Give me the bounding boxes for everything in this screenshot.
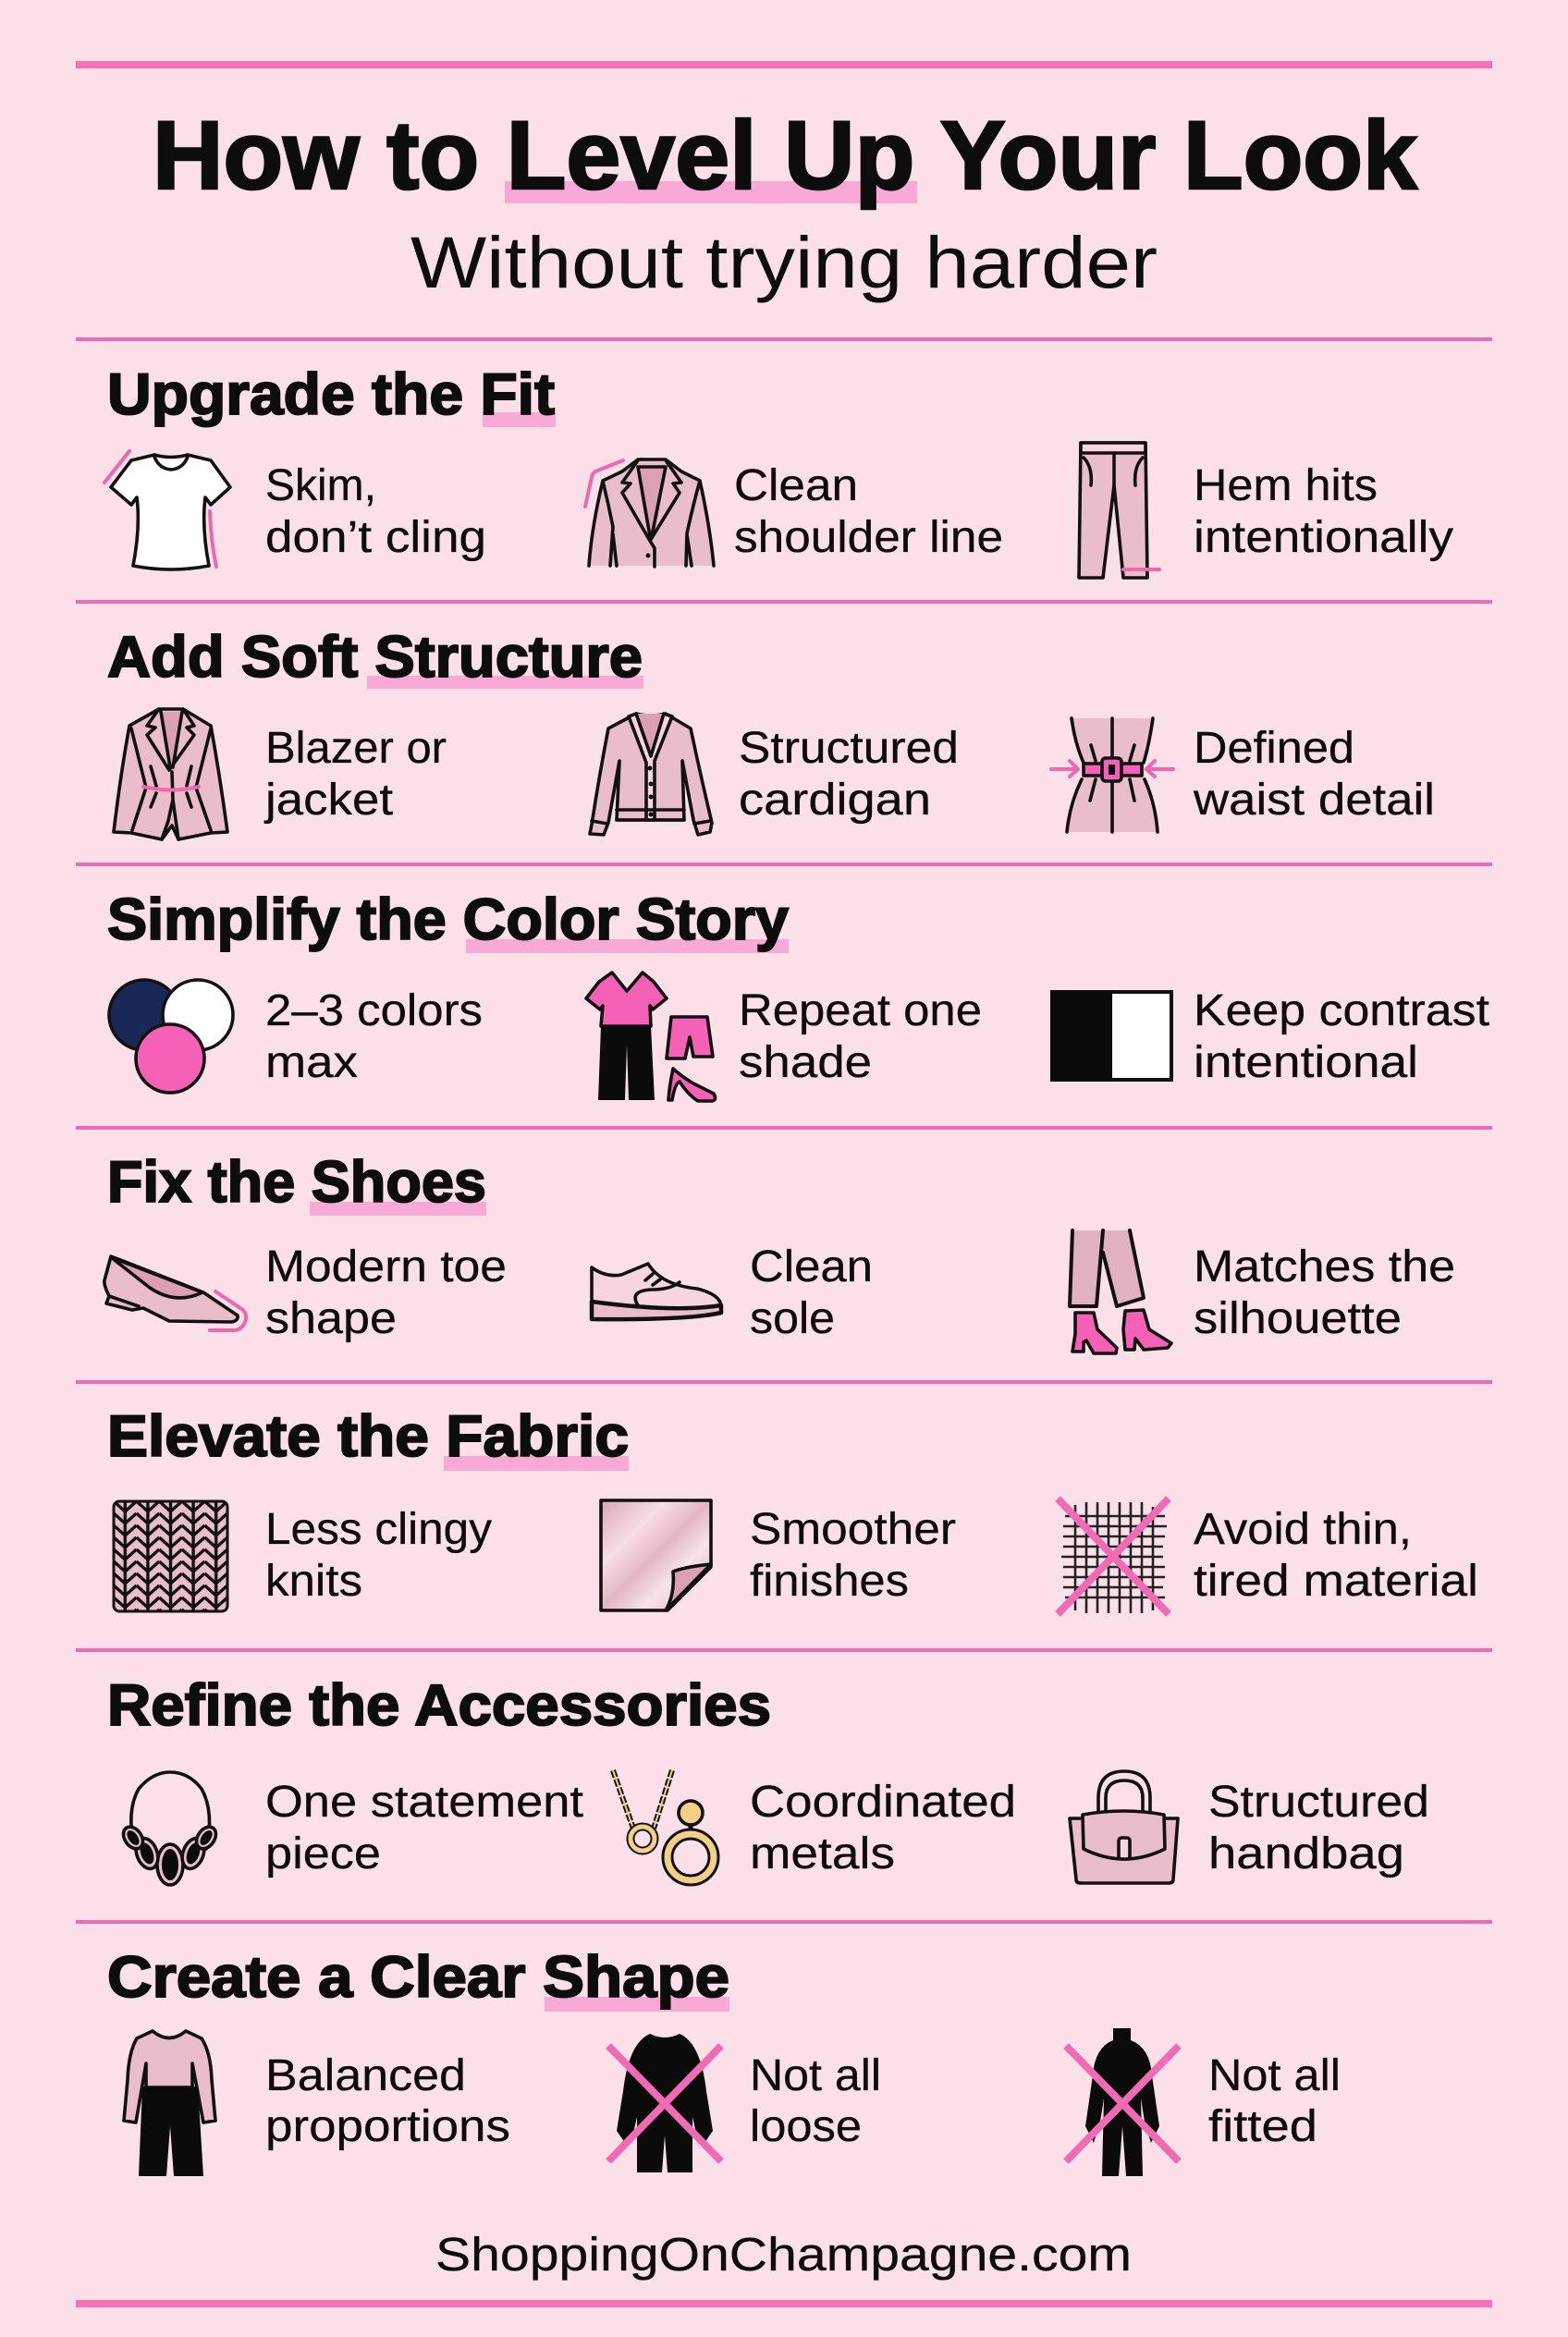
label: Defined — [1194, 724, 1354, 773]
label: intentionally — [1194, 513, 1453, 562]
subtitle: Without trying harder — [410, 221, 1158, 303]
label: tired material — [1194, 1557, 1478, 1606]
item: Repeat one shade — [586, 973, 982, 1101]
label: cardigan — [739, 776, 931, 825]
icon: balanced outfit — [124, 2031, 215, 2176]
label: Modern toe — [265, 1242, 507, 1291]
heading: Fix the Shoes: Fix the Shoes — [107, 1150, 486, 1215]
icon: loose silhouette crossed out — [608, 2034, 721, 2172]
label: Not all — [1208, 2051, 1341, 2100]
label: Less clingy — [265, 1505, 492, 1554]
item: Less clingy knits — [114, 1501, 492, 1611]
label: jacket — [263, 776, 393, 825]
label — [1194, 1242, 1455, 1343]
panel: Add Soft Structure — [107, 625, 1435, 839]
heading: Create a Clear Shape: Create a Clear Shape — [107, 1945, 729, 2010]
item: 2–3 colors max — [109, 980, 483, 1093]
label — [1208, 1778, 1429, 1878]
label: don’t cling — [265, 513, 486, 562]
label: shape — [265, 1294, 397, 1343]
item: Structured handbag — [1070, 1771, 1429, 1883]
label: intentional — [1194, 1038, 1418, 1087]
icon: three colour circles — [109, 980, 233, 1093]
item: Coordinated metals — [613, 1770, 1016, 1880]
icon: fitted silhouette crossed out — [1066, 2028, 1179, 2176]
label: piece — [265, 1829, 381, 1878]
icon: worn mesh with cross — [1058, 1499, 1169, 1614]
icon: knit swatch — [114, 1501, 227, 1611]
label — [1208, 2051, 1341, 2151]
icon: black and white square — [1050, 990, 1171, 1082]
label: finishes — [750, 1557, 909, 1606]
label — [739, 724, 959, 825]
label: Hem hits — [1194, 461, 1378, 510]
label: sole — [750, 1294, 835, 1343]
icon: cardigan — [590, 714, 712, 835]
label — [265, 2051, 510, 2151]
heading: Elevate the Fabric: Elevate the Fabric — [107, 1404, 629, 1469]
label: Balanced — [265, 2051, 466, 2100]
label: Matches the — [1194, 1242, 1455, 1291]
label: handbag — [1208, 1829, 1404, 1878]
panel: Refine the Accessories — [107, 1673, 1429, 1885]
panel: Elevate the Fabric — [107, 1404, 1478, 1614]
panel: Create a Clear Shape — [107, 1945, 1341, 2176]
icon: handbag — [1070, 1771, 1178, 1883]
label: knits — [265, 1557, 362, 1606]
icon: t-shirt — [104, 451, 230, 569]
icon: trousers with pink boots — [1070, 1230, 1171, 1353]
panel: Upgrade the Fit — [104, 362, 1453, 578]
heading: Add Soft Structure: Add Soft Structure — [107, 625, 643, 690]
icon: outfit with pink pieces — [586, 973, 716, 1101]
label — [750, 1778, 1016, 1878]
heading: Upgrade the Fit: Upgrade the Fit — [107, 362, 555, 427]
label: Not all — [750, 2051, 881, 2100]
icon: oxford shoe — [592, 1264, 721, 1319]
label: Blazer or — [265, 724, 447, 773]
label: Avoid thin, — [1194, 1505, 1412, 1554]
item: Blazer or jacket — [114, 709, 447, 839]
label: Keep contrast — [1194, 986, 1489, 1035]
item: Keep contrast intentional — [1050, 986, 1489, 1087]
icon: belted waist — [1051, 718, 1173, 832]
label: shoulder line — [734, 513, 1003, 562]
item: Skim, don't cling — [104, 451, 486, 569]
label: max — [265, 1038, 358, 1087]
label: fitted — [1208, 2102, 1317, 2151]
item: Defined waist detail — [1051, 718, 1435, 832]
item: Balanced proportions — [124, 2031, 510, 2176]
label — [1194, 461, 1453, 562]
label — [734, 461, 1003, 562]
label — [750, 2051, 881, 2151]
label — [265, 1242, 507, 1343]
icon: satin swatch — [601, 1500, 711, 1610]
label: Structured — [1208, 1778, 1429, 1827]
icon: trousers — [1079, 443, 1159, 578]
label: Clean — [734, 461, 858, 510]
label: Skim, — [265, 461, 376, 510]
label: Structured — [739, 724, 959, 773]
label: silhouette — [1194, 1294, 1402, 1343]
label — [1194, 1505, 1478, 1606]
label: metals — [750, 1829, 895, 1878]
icon: jacket — [585, 459, 714, 567]
label: Repeat one — [739, 986, 982, 1035]
item: Modern toe shape — [104, 1242, 507, 1343]
label — [265, 986, 483, 1087]
icon: chain and earring — [613, 1770, 714, 1880]
label: 2–3 colors — [265, 986, 483, 1035]
label: waist detail — [1193, 776, 1435, 825]
item: Not all fitted — [1066, 2028, 1341, 2176]
label: loose — [750, 2102, 862, 2151]
panel: Simplify the Color Story — [107, 887, 1489, 1101]
item: Matches the silhouette — [1070, 1230, 1455, 1353]
icon: blazer — [114, 709, 227, 839]
label — [750, 1505, 956, 1606]
item: Clean shoulder line — [585, 459, 1003, 567]
label — [1193, 724, 1435, 825]
label — [739, 986, 982, 1087]
label — [265, 1778, 583, 1878]
label — [265, 1505, 492, 1606]
label — [265, 461, 486, 562]
item: Avoid thin, tired material — [1058, 1499, 1478, 1614]
item: Structured cardigan — [590, 714, 959, 835]
label: proportions — [265, 2102, 510, 2151]
heading: Refine the Accessories: Refine the Accessories — [107, 1673, 771, 1738]
label: One statement — [265, 1778, 583, 1827]
item: Hem hits intentionally — [1079, 443, 1453, 578]
label — [750, 1242, 873, 1343]
item: Not all loose — [608, 2034, 881, 2172]
item: Clean sole — [592, 1242, 873, 1343]
footer website: ShoppingOnChampagne.com — [435, 2228, 1132, 2281]
label — [1194, 986, 1489, 1087]
item: Smoother finishes — [601, 1500, 956, 1610]
title: How to Level Up Your Look — [153, 102, 1418, 210]
label: Smoother — [750, 1505, 956, 1554]
icon: pointed flat — [104, 1256, 246, 1330]
panel: Fix the Shoes — [104, 1150, 1455, 1353]
label — [263, 724, 447, 825]
label: shade — [739, 1038, 872, 1087]
label: Coordinated — [750, 1778, 1016, 1827]
icon: statement necklace — [119, 1772, 220, 1885]
item: One statement piece — [119, 1772, 583, 1885]
heading: Simplify the Color Story: Simplify the Color Story — [107, 887, 789, 952]
label: Clean — [750, 1242, 873, 1291]
